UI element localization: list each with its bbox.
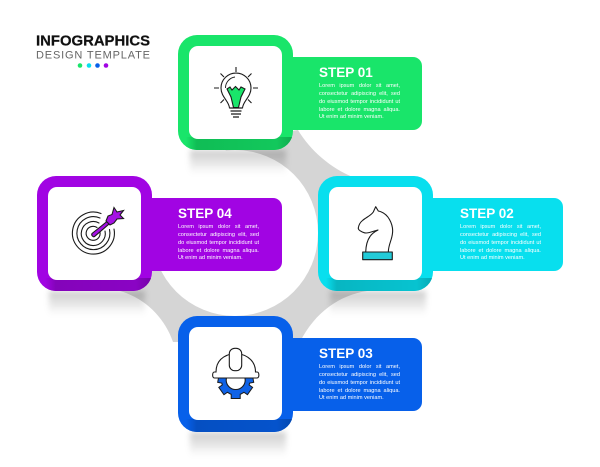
panel: step 03 [280, 338, 422, 411]
panel: step 04 [140, 198, 282, 271]
text: step 02: do eiusmod tempor incididunt ut [460, 240, 541, 246]
heading: step 02: STEP 02 [460, 206, 514, 221]
text: step 01 [319, 83, 400, 120]
text: step 02: labore et dolore magna aliqua. [460, 248, 541, 254]
text: step 03: labore et dolore magna aliqua. [319, 388, 400, 394]
heading: step 03: STEP 03 [319, 346, 373, 361]
text: step 03: Ut enim ad minim veniam. [319, 395, 384, 401]
tile: step 04 [37, 176, 152, 291]
shadow: step 03 [190, 432, 286, 456]
tile: step 02 [318, 176, 433, 291]
heading: step 04: STEP 04 [178, 206, 232, 221]
text: step 04: consectetur adipiscing elit, sed [178, 232, 259, 238]
text: step 01: Lorem ipsum dolor sit amet, [319, 83, 400, 89]
title: INFOGRAPHICS [36, 34, 150, 50]
tile: step 01 [178, 35, 293, 150]
text: step 04 [178, 224, 260, 261]
text: step 02: Ut enim ad minim veniam. [460, 255, 525, 261]
text: step 02: Lorem ipsum dolor sit amet, [460, 224, 541, 230]
shadow: step 01 [190, 150, 286, 174]
text: step 03: consectetur adipiscing elit, sed [319, 372, 400, 378]
title block [36, 34, 150, 68]
tile: step 03 [178, 316, 293, 432]
text: step 04: do eiusmod tempor incididunt ut [178, 240, 259, 246]
text: step 01: labore et dolore magna aliqua. [319, 107, 400, 113]
text: step 04: labore et dolore magna aliqua. [178, 248, 259, 254]
subtitle: DESIGN TEMPLATE [36, 50, 150, 62]
text: step 02: consectetur adipiscing elit, sed [460, 232, 541, 238]
text: step 01: consectetur adipiscing elit, sed [319, 91, 400, 97]
text: step 04: Ut enim ad minim veniam. [178, 255, 243, 261]
shadow: step 02 [330, 291, 426, 315]
text: step 03: Lorem ipsum dolor sit amet, [319, 364, 400, 370]
text: step 04: Lorem ipsum dolor sit amet, [178, 224, 259, 230]
decorative colour dots [78, 63, 108, 68]
text: step 01: Ut enim ad minim veniam. [319, 114, 384, 120]
text: step 03 [319, 364, 400, 401]
panel: step 02 [421, 198, 563, 271]
panel: step 01 [280, 57, 422, 130]
heading: step 01: STEP 01 [319, 65, 373, 80]
shadow: step 04 [49, 291, 145, 315]
text: step 03: do eiusmod tempor incididunt ut [319, 380, 400, 386]
text: step 01: do eiusmod tempor incididunt ut [319, 99, 400, 105]
text: step 02 [460, 224, 542, 261]
